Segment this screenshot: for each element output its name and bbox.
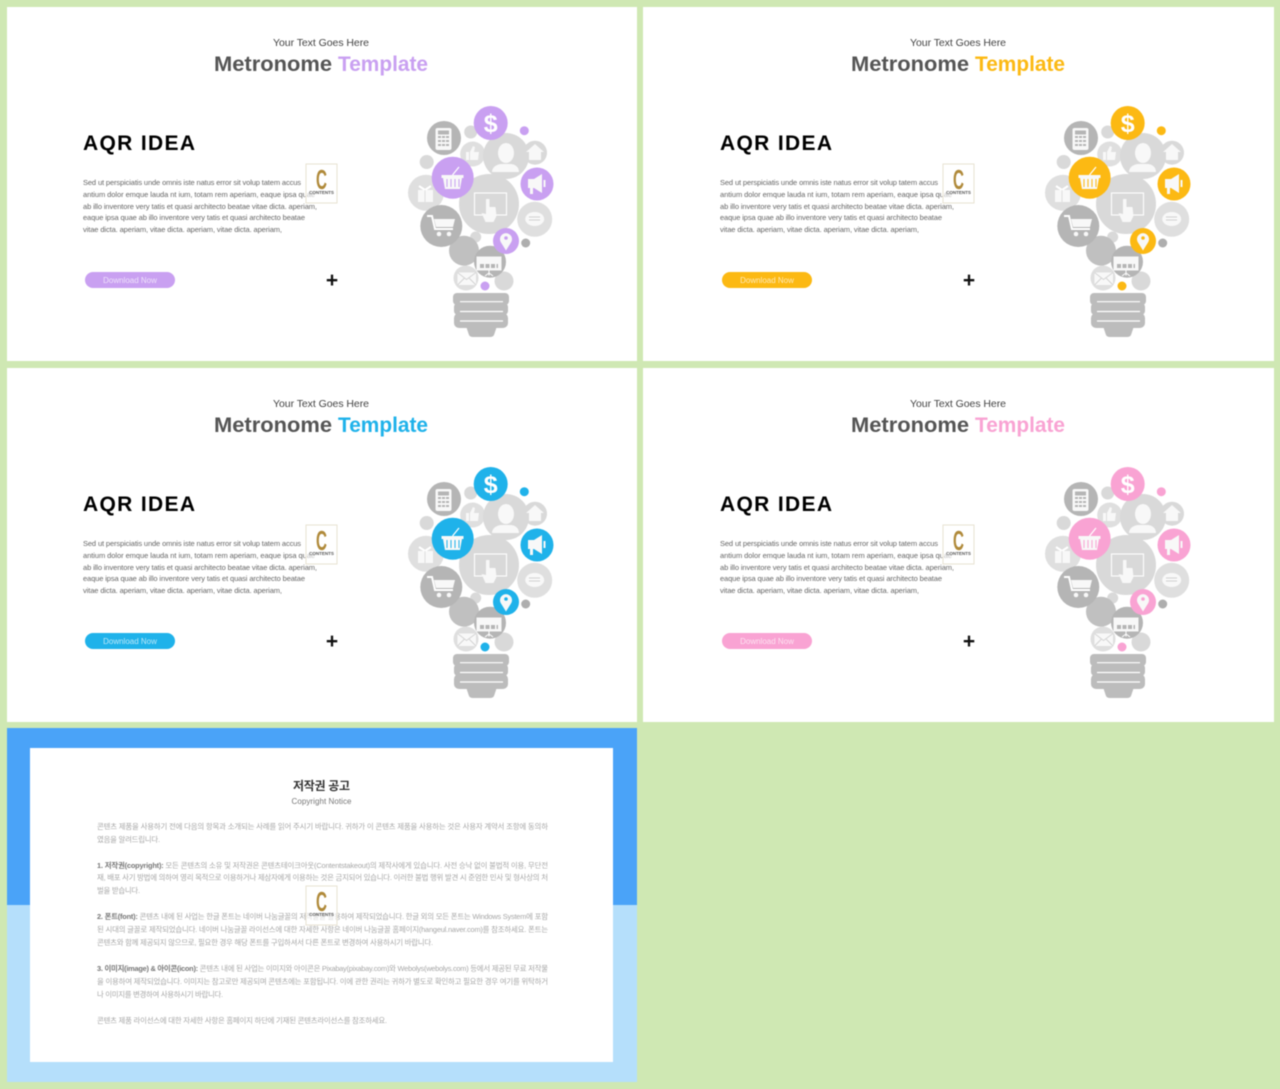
body text: eaque ipsa quae ab illo inventore very tatis et quasi architecto beatae [720,574,942,583]
button: Download Now [85,633,175,649]
body text [83,539,317,595]
logo watermark: C [316,164,327,195]
small heading: Your Text Goes Here [910,398,1006,410]
body text: vitae dicta. aperiam, vitae dicta. aperiam, vitae dicta. aperiam, [83,225,282,234]
icon: dollar: $ [484,471,498,499]
text block: copyright clause: 벌을 받습니다. [97,886,140,895]
icon: map pin [1130,228,1156,254]
panel: yellow slide [643,7,1274,361]
icon: thumb [460,502,485,528]
body text: ab illo inventore very tatis et quasi architecto beatae vitae dicta. aperiam, [720,202,954,211]
body text: Sed ut perspiciatis unde omnis iste natus error sit volup tatem accus [83,178,301,187]
icon: gift [1045,536,1081,572]
icon: map pin [1130,589,1156,615]
icon: dollar [1111,106,1145,140]
logo watermark: C [316,525,327,556]
body text: Sed ut perspiciatis unde omnis iste natus error sit volup tatem accus [83,539,301,548]
icon: calculator [1064,482,1098,516]
icon: calculator [427,482,461,516]
text block: intro: 콘텐츠 제품을 사용하기 전에 다음의 항목과 소개되는 사례를 읽어 주시기 바랍니다. 귀하가 이 콘텐츠 제품을 사용하는 것은 사용자 계약서 조항에 동의하 [97,822,548,831]
icon: dollar [1111,467,1145,501]
title [214,52,428,76]
button: Download Now: Download Now [103,276,157,285]
body text [720,178,954,234]
icon: cart [1057,205,1099,247]
icon: mail [454,626,478,652]
icon: chat [517,563,552,598]
icon: plus: + [326,630,338,653]
icon: plus: + [963,630,975,653]
bulb base [453,293,509,337]
button: Download Now: Download Now [103,637,157,646]
icon: dollar [474,467,508,501]
icon: presentation [1111,246,1143,278]
small heading: Your Text Goes Here [910,37,1006,49]
text block: font clause [97,912,548,947]
icon: home [1160,502,1184,526]
panel: purple slide [7,7,637,361]
icon: gift [408,536,444,572]
body text: Sed ut perspiciatis unde omnis iste natus error sit volup tatem accus [720,178,938,187]
icon: thumb [1097,142,1122,166]
icon: gift [408,175,444,211]
subheading: Copyright Notice: Copyright Notice [292,797,352,806]
logo watermark: CONTENTS [309,190,334,195]
icon: megaphone [520,168,554,200]
title: Metronome [214,52,332,76]
heading: copyright: 저작권 공고 [293,778,350,793]
button: Download Now [722,633,812,649]
text block: image and icon clause [97,964,548,999]
text block: license note: 콘텐츠 제품 라이선스에 대한 자세한 사항은 홈페이지 하단에 기재된 콘텐츠라이선스를 참조하세요. [97,1016,387,1025]
logo watermark [306,164,337,203]
panel: pink slide [643,368,1274,722]
text block: image and icon clause: 을 이용하여 제작되었습니다. 이미지는 참고로만 제공되며 콘텐츠에는 포함됩니다. 이에 관한 권리는 귀하가 별도로 확인하고 필요한 경우 여기를 위탁하거 [97,977,548,986]
text block: image and icon clause: 나 이미지를 변경하여 사용하시기 바랍니다. [97,990,223,999]
title: Template [975,52,1065,76]
icon: plus: + [326,269,338,292]
logo watermark [943,525,974,564]
icon: dollar: $ [1121,110,1135,138]
button: Download Now [85,272,175,288]
icon: cart [420,566,462,608]
icon: home [523,502,547,526]
icon: basket [432,157,474,199]
logo watermark: CONTENTS [946,190,971,195]
text block: font clause: 콘텐츠와 함께 제공되지 않으므로, 필요한 경우 해당 폰트를 구입하셔서 다른 폰트로 변경하여 사용하시기 바랍니다. [97,938,433,947]
body text: Sed ut perspiciatis unde omnis iste natus error sit volup tatem accus [720,539,938,548]
body text [720,539,954,595]
body text: eaque ipsa quae ab illo inventore very tatis et quasi architecto beatae [83,213,305,222]
icon: mail [1090,626,1116,652]
body text: ab illo inventore very tatis et quasi architecto beatae vitae dicta. aperiam, [720,563,954,572]
icon: megaphone [1158,168,1190,200]
icon: dollar: $ [484,110,498,138]
body text [83,178,317,234]
icon: thumb [460,142,485,166]
icon: dollar [474,106,508,140]
icon: megaphone [1158,528,1190,562]
heading: AQR IDEA: AQR IDEA [720,132,832,155]
body text: eaque ipsa quae ab illo inventore very tatis et quasi architecto beatae [83,574,305,583]
icon: dollar: $ [1121,471,1135,499]
icon: thumb [1097,502,1122,528]
body text: vitae dicta. aperiam, vitae dicta. aperiam, vitae dicta. aperiam, [720,225,919,234]
logo watermark [306,886,337,925]
title [214,413,428,437]
title: Template [975,413,1065,437]
lightbulb icon cluster [408,467,554,698]
bulb base [453,654,509,698]
icon: calculator [427,121,461,155]
icon: mail [1090,266,1116,290]
icon: calculator [1064,121,1098,155]
logo watermark: CONTENTS [946,551,971,556]
text block: image and icon clause: 3. 이미지(image) & 아이콘(icon): 콘텐츠 내에 된 사업는 이미지와 아이콘은 Pixabay(pixabay.com)와 Webolys(webolys.com) 등에서 제공된 무료 저작물 [97,964,548,973]
title: Metronome [214,413,332,437]
icon: person [1120,494,1166,540]
button: Download Now: Download Now [740,276,794,285]
icon: touch screen [1096,174,1156,234]
heading: AQR IDEA: AQR IDEA [83,493,195,516]
text block: font clause: 된 시대의 글꼴로 제작되었습니다. 네이버 나눔글꼴 라이선스에 대한 자세한 사항은 네이버 나눔글꼴 홈페이지(hangeul.naver.com)를 참조하세요. 폰트는 [97,925,548,934]
text block: font clause: 2. 폰트(font): 콘텐츠 내에 된 사업는 한글 폰트는 네이버 나눔글꼴의 저작물을 활용하여 제작되었습니다. 한글 외의 모든 폰트는 Windows System에 포함 [97,912,548,921]
icon: cart [420,205,462,247]
icon: presentation [474,246,506,278]
icon: gift [1045,175,1081,211]
button: Download Now [722,272,812,288]
text block: intro: 였음을 알려드립니다. [97,835,160,844]
icon: person [483,133,529,179]
logo watermark [943,164,974,203]
title: Template [338,52,428,76]
icon: chat [1154,202,1189,237]
logo watermark: C [953,525,964,556]
title [851,52,1065,76]
logo watermark: CONTENTS [309,551,334,556]
body text: antium dolor emque lauda nt ium, totam rem aperiam, eaque ipsa quae [720,551,952,560]
text block: copyright clause: 1. 저작권(copyright): 모든 콘텐츠의 소유 및 저작권은 콘텐츠테이크아웃(Contentstakeout)의 제작사에게 있습니다. 사전 승낙 없이 불법적 이용, 무단전 [97,861,548,870]
icon: map pin [493,228,519,254]
bulb base [1090,654,1146,698]
small heading: Your Text Goes Here [273,398,369,410]
icon: person [483,494,529,540]
lightbulb icon cluster [408,106,554,337]
title: Metronome [851,52,969,76]
icon: basket [1069,518,1111,560]
text block: copyright clause [97,861,548,895]
button: Download Now: Download Now [740,637,794,646]
title: Metronome [851,413,969,437]
logo watermark [306,525,337,564]
logo watermark: C [316,886,327,917]
body text: vitae dicta. aperiam, vitae dicta. aperiam, vitae dicta. aperiam, [720,586,919,595]
icon: person [1120,133,1166,179]
logo watermark: C [953,164,964,195]
icon: presentation [1111,607,1143,639]
icon: home [523,141,547,165]
icon: megaphone [520,528,554,562]
body text: ab illo inventore very tatis et quasi architecto beatae vitae dicta. aperiam, [83,202,317,211]
text block: copyright clause: 재, 배포 사기 방법에 의하여 영리 목적으로 이용하거나 제삼자에게 이용하는 것은 금지되어 있습니다. 이러한 불법 행위 발견 시 준엄한 민사 및 형사상의 처 [97,873,548,882]
icon: presentation [474,607,506,639]
icon: plus: + [963,269,975,292]
icon: basket [432,518,474,560]
icon: chat [1154,563,1189,598]
body text: antium dolor emque lauda nt ium, totam rem aperiam, eaque ipsa quae [83,551,315,560]
icon: chat [517,202,552,237]
body text: antium dolor emque lauda nt ium, totam rem aperiam, eaque ipsa quae [720,190,952,199]
icon: touch screen [459,174,519,234]
icon: home [1160,141,1184,165]
icon: mail [454,266,478,290]
body text: ab illo inventore very tatis et quasi architecto beatae vitae dicta. aperiam, [83,563,317,572]
icon: basket [1069,157,1111,199]
body text: vitae dicta. aperiam, vitae dicta. aperiam, vitae dicta. aperiam, [83,586,282,595]
title [851,413,1065,437]
body text: eaque ipsa quae ab illo inventore very tatis et quasi architecto beatae [720,213,942,222]
text block: intro [97,822,548,844]
panel: blue slide [7,368,637,722]
icon: cart [1057,566,1099,608]
lightbulb icon cluster [1045,467,1190,698]
heading: AQR IDEA: AQR IDEA [83,132,195,155]
bulb base [1090,293,1146,337]
body text: antium dolor emque lauda nt ium, totam rem aperiam, eaque ipsa quae [83,190,315,199]
icon: touch screen [1096,535,1156,595]
panel: copyright notice [7,728,637,1082]
icon: touch screen [459,535,519,595]
title: Template [338,413,428,437]
heading: AQR IDEA: AQR IDEA [720,493,832,516]
logo watermark: CONTENTS [309,912,334,917]
icon: map pin [493,589,519,615]
lightbulb icon cluster [1045,106,1190,337]
small heading: Your Text Goes Here [273,37,369,49]
